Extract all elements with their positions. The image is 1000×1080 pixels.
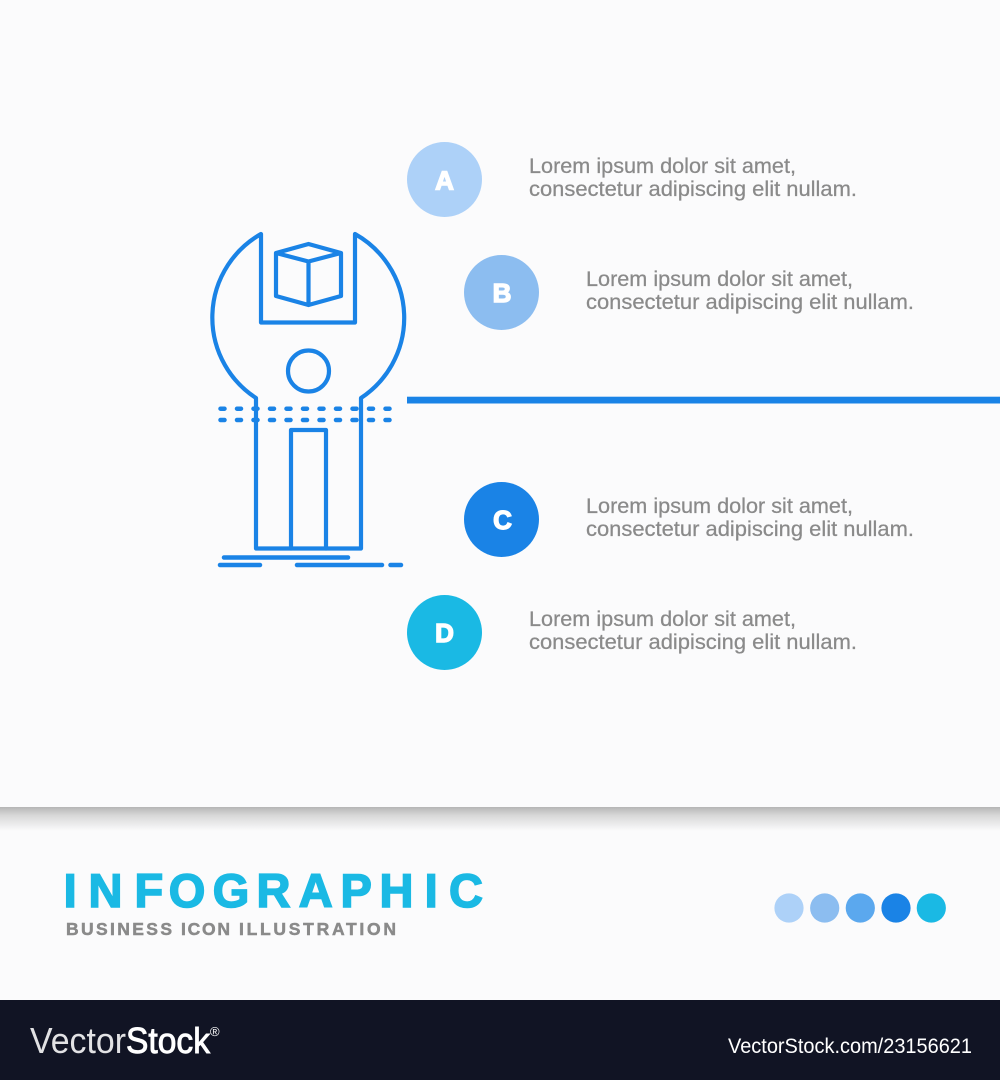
footer bar <box>0 1000 1000 1080</box>
dashed lines across handle <box>220 409 390 420</box>
text A <box>529 155 857 201</box>
item C <box>464 482 914 557</box>
text A: Lorem ipsum dolor sit amet, <box>529 155 796 178</box>
badge D: D <box>435 618 454 648</box>
text C <box>586 495 914 541</box>
subtitle: BUSINESS <box>66 919 172 939</box>
shadow band <box>0 807 1000 831</box>
subtitle: ICON <box>181 919 230 939</box>
brand logo: Stock <box>126 1020 211 1061</box>
horizontal connector line <box>407 397 1000 404</box>
subtitle: ILLUSTRATION <box>239 919 396 939</box>
handle slot <box>291 430 326 548</box>
text D: Lorem ipsum dolor sit amet, <box>529 608 796 631</box>
text B <box>586 268 914 314</box>
badge A <box>407 142 482 217</box>
icon: wrench with cube <box>212 234 404 565</box>
brand logo: ® <box>210 1024 220 1039</box>
badge C <box>464 482 539 557</box>
title: INFOGRAPHIC <box>64 864 483 917</box>
badge D <box>407 595 482 670</box>
text B: Lorem ipsum dolor sit amet, <box>586 268 853 291</box>
badge C: C <box>493 505 512 535</box>
item D <box>407 595 857 670</box>
text C: consectetur adipiscing elit nullam. <box>586 518 914 541</box>
brand logo <box>30 1020 220 1061</box>
wrench hole <box>288 350 329 392</box>
text D: consectetur adipiscing elit nullam. <box>529 631 857 654</box>
ground lines <box>220 558 401 565</box>
text A: consectetur adipiscing elit nullam. <box>529 178 857 201</box>
text D <box>529 608 857 654</box>
wrench head and handle outline <box>212 234 404 548</box>
subtitle <box>66 919 396 939</box>
text C: Lorem ipsum dolor sit amet, <box>586 495 853 518</box>
palette dots <box>774 893 946 923</box>
cube in jaw <box>276 244 341 305</box>
badge A: A <box>435 166 454 196</box>
item A <box>407 142 857 217</box>
badge B <box>464 255 539 330</box>
text B: consectetur adipiscing elit nullam. <box>586 291 914 314</box>
badge B: B <box>493 278 511 308</box>
brand logo: Vector <box>30 1020 126 1061</box>
image id: VectorStock.com/23156621 <box>728 1035 972 1058</box>
item B <box>464 255 914 330</box>
